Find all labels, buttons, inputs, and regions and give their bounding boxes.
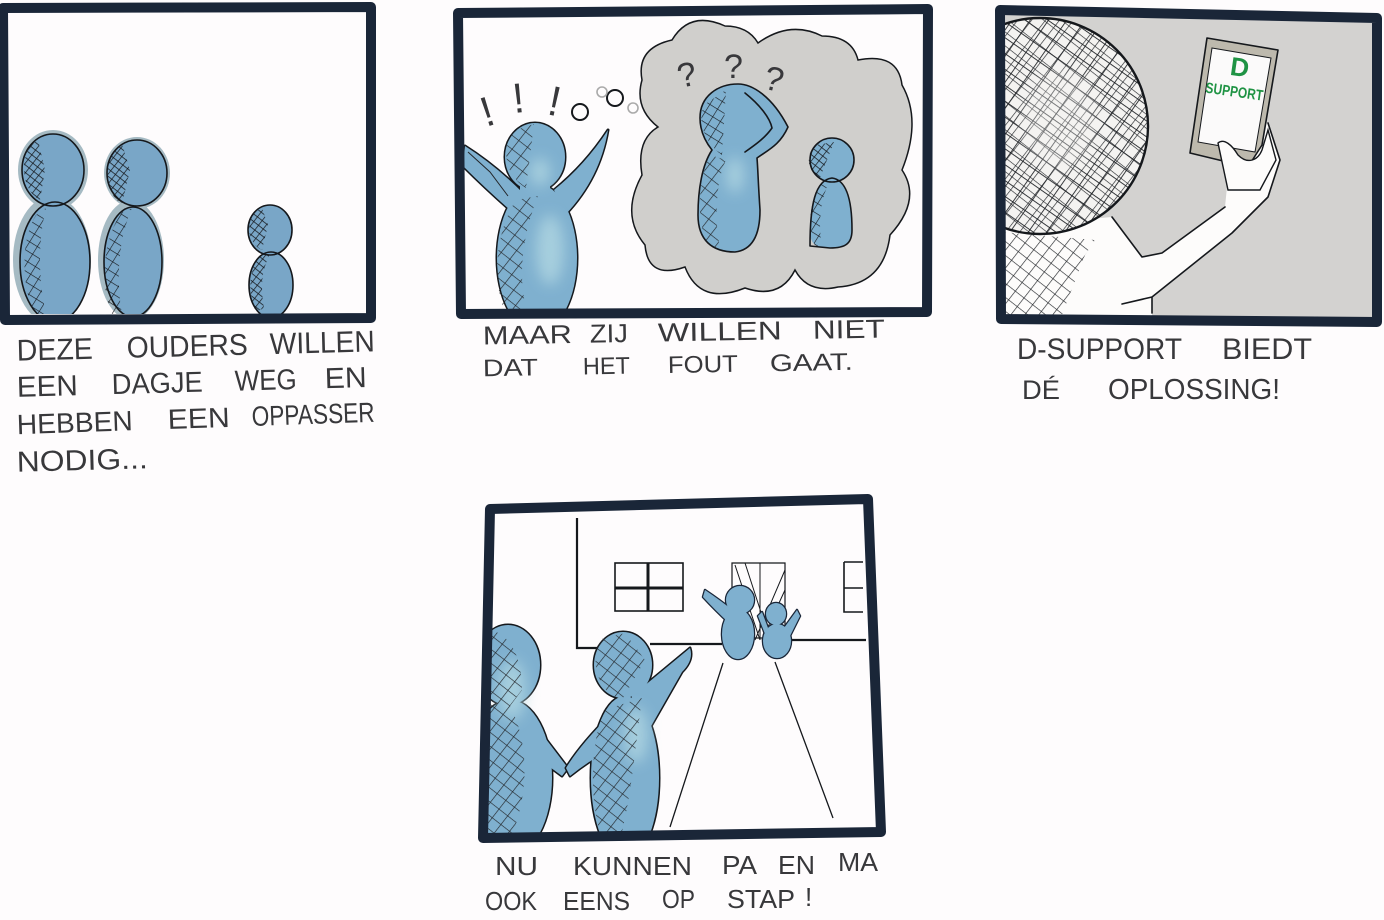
caption: DÉ bbox=[1022, 375, 1060, 405]
figure: left parent bbox=[13, 130, 91, 324]
grey background bbox=[1002, 14, 1375, 318]
caption: EENS bbox=[563, 886, 630, 916]
panel: parents and child bbox=[3, 7, 375, 479]
caption: WEG bbox=[234, 364, 297, 398]
thought bubbles bbox=[572, 87, 638, 120]
caption: KUNNEN bbox=[573, 851, 692, 881]
figure: left parent bbox=[488, 624, 567, 833]
panel frame bbox=[458, 9, 928, 314]
figure: right parent bbox=[98, 137, 170, 320]
figure: waving child bbox=[758, 603, 800, 658]
caption: NU bbox=[495, 851, 538, 881]
caption: HET bbox=[583, 353, 630, 380]
caption: MA bbox=[838, 847, 879, 877]
caption: WILLEN bbox=[269, 325, 375, 361]
figures: parents from behind bbox=[488, 624, 692, 833]
caption: ! bbox=[805, 882, 812, 912]
caption: STAP bbox=[727, 884, 795, 914]
caption: DAT bbox=[483, 354, 539, 382]
caption: OP bbox=[662, 884, 695, 914]
panel: worried parent with thought cloud bbox=[458, 9, 928, 382]
panel frame bbox=[1000, 10, 1377, 322]
house bbox=[577, 518, 866, 648]
panel: D-Support app on phone bbox=[995, 5, 1382, 400]
caption: ZIJ bbox=[590, 318, 628, 349]
caption: NODIG... bbox=[16, 443, 148, 479]
D-Support logo: SUPPORT bbox=[1204, 80, 1264, 105]
caption: OOK bbox=[485, 886, 538, 916]
caption: DAGJE bbox=[111, 367, 203, 401]
panel frame bbox=[483, 499, 881, 838]
caption: FOUT bbox=[668, 351, 738, 379]
question marks: ? bbox=[760, 59, 788, 100]
caption: OPPASSER bbox=[251, 397, 375, 432]
figure: imagined parent bbox=[698, 84, 788, 252]
caption: MAAR bbox=[483, 319, 572, 351]
caption: OPLOSSING! bbox=[1108, 374, 1280, 406]
D-Support logo bbox=[1204, 48, 1269, 105]
exclamation marks: ! bbox=[510, 74, 527, 122]
caption: HEBBEN bbox=[16, 405, 133, 440]
caption: WILLEN bbox=[658, 315, 782, 347]
D-Support logo: D bbox=[1228, 51, 1251, 83]
figure: imagined child bbox=[809, 138, 854, 248]
question marks: ? bbox=[674, 55, 700, 96]
thought cloud bbox=[632, 20, 912, 294]
caption: NIET bbox=[813, 313, 885, 345]
exclamation marks: ! bbox=[474, 87, 500, 136]
caption: DEZE bbox=[16, 333, 93, 368]
figures: two parents and a child bbox=[13, 130, 293, 324]
caption bbox=[16, 325, 375, 479]
caption: EN bbox=[324, 362, 367, 395]
caption bbox=[483, 313, 885, 382]
thumb bbox=[1218, 130, 1276, 190]
caption bbox=[485, 847, 879, 916]
caption: OUDERS bbox=[126, 329, 248, 365]
figure: worried parent bbox=[463, 123, 608, 332]
figure: waving grandparent bbox=[703, 586, 754, 659]
question marks bbox=[674, 48, 788, 100]
caption: GAAT. bbox=[770, 349, 853, 377]
caption: EEN bbox=[16, 370, 78, 404]
caption: D-SUPPORT bbox=[1017, 333, 1182, 366]
caption bbox=[1017, 333, 1312, 406]
figure: child bbox=[248, 205, 293, 318]
caption: PA bbox=[722, 850, 758, 880]
caption: EEN bbox=[167, 402, 230, 435]
caption: EN bbox=[778, 850, 815, 880]
panel frame bbox=[3, 7, 371, 320]
exclamation marks: ! bbox=[544, 77, 565, 125]
phone bbox=[1190, 38, 1278, 190]
walkway bbox=[670, 662, 833, 827]
exclamation marks bbox=[474, 74, 565, 136]
panel: parents waving goodbye bbox=[468, 499, 881, 916]
figure: right parent bbox=[566, 632, 691, 860]
question marks: ? bbox=[724, 48, 743, 86]
caption: BIEDT bbox=[1222, 333, 1312, 366]
person seen from behind bbox=[1005, 16, 1281, 316]
